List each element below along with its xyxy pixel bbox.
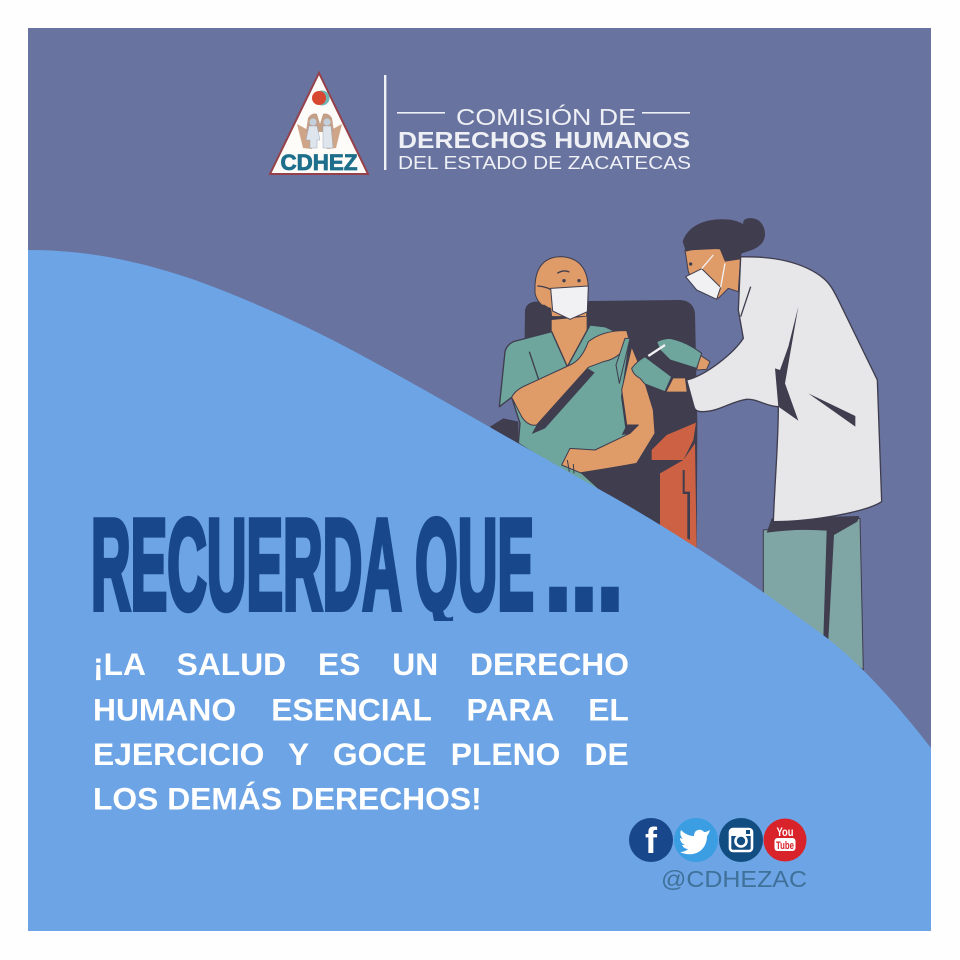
body message: LOS DEMÁS DERECHOS! — [93, 780, 482, 816]
social icons — [629, 818, 806, 862]
social handle: @CDHEZAC — [661, 866, 807, 892]
icon: youtube: Tube — [776, 840, 794, 852]
logo hands and figures — [297, 114, 342, 149]
organisation name: DERECHOS HUMANOS — [398, 127, 690, 153]
logo divider — [384, 75, 386, 170]
blue wave panel — [28, 250, 931, 931]
nurse — [632, 218, 882, 670]
chair — [490, 300, 697, 553]
body message: ¡LA SALUD ES UN DERECHO — [93, 646, 629, 682]
heading — [93, 516, 619, 621]
organisation name: COMISIÓN DE — [456, 104, 636, 130]
logo wordmark: CDHEZ — [280, 150, 358, 175]
icon: twitter — [674, 818, 718, 862]
illustration: vaccination scene — [490, 218, 882, 670]
icon: instagram — [719, 818, 763, 862]
icon: facebook: f — [645, 820, 658, 861]
logo sun emblem — [312, 90, 330, 106]
body message — [93, 646, 629, 816]
body message: HUMANO ESENCIAL PARA EL — [93, 692, 629, 728]
icon: youtube — [764, 818, 806, 862]
organisation name: DEL ESTADO DE ZACATECAS — [398, 152, 691, 173]
heading: ... — [545, 493, 623, 637]
logo: CDHEZ triangle — [270, 73, 368, 175]
patient — [499, 257, 655, 500]
body message: EJERCICIO Y GOCE PLENO DE — [93, 736, 629, 772]
icon: facebook — [629, 818, 673, 862]
organisation name — [397, 104, 691, 173]
icon: youtube: You — [776, 825, 794, 839]
